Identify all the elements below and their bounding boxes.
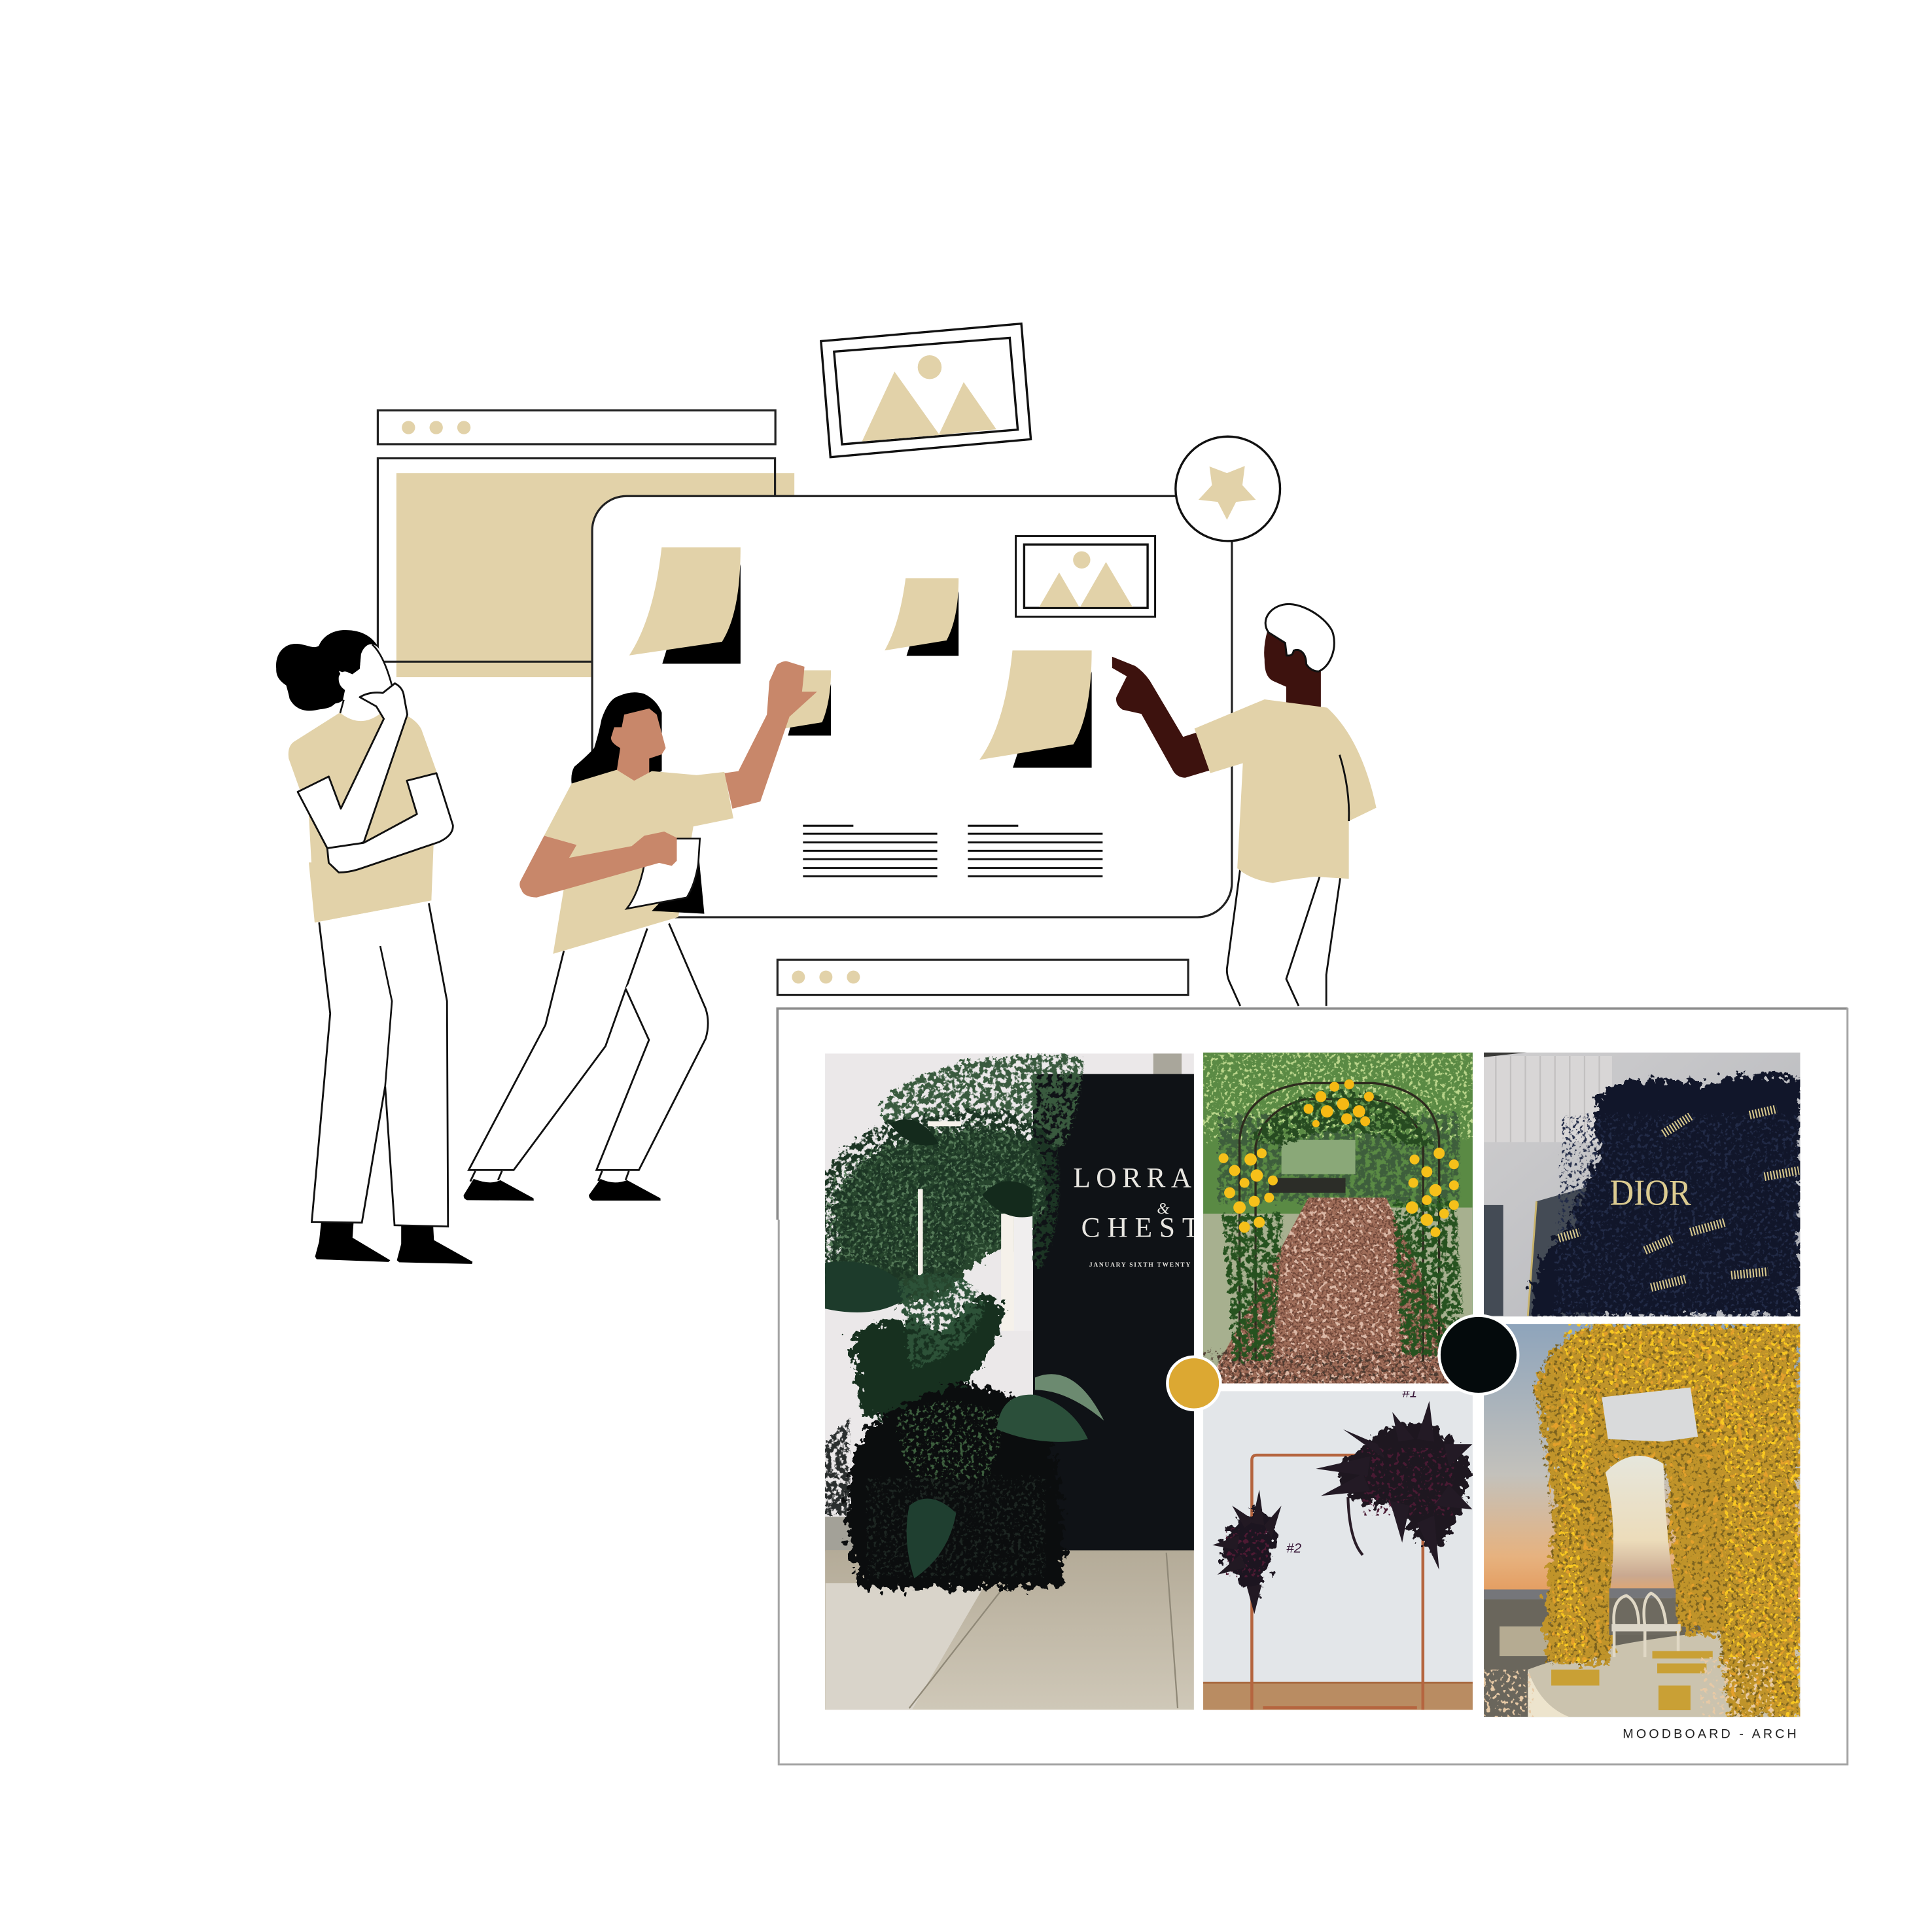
- wood floor: [1203, 1683, 1473, 1710]
- ground: [1484, 1600, 1800, 1717]
- sign text: &: [1157, 1200, 1169, 1218]
- photo: copper frame with dark flowers: [1203, 1386, 1473, 1710]
- hair: [276, 630, 380, 711]
- shirt: [544, 770, 733, 954]
- caption: MOODBOARD - ARCH: [1623, 1727, 1797, 1741]
- colour swatch: gold: [1167, 1357, 1220, 1410]
- foliage: dense green texture: [823, 1110, 1060, 1306]
- pointing arm: [1112, 657, 1210, 778]
- person: woman placing a note: [464, 661, 817, 1201]
- flower spray: large: [1337, 1422, 1469, 1555]
- head and neck: [1264, 631, 1321, 707]
- browser bar: bottom: [777, 960, 1188, 995]
- arch body: [1534, 1324, 1800, 1717]
- shirt arm line: [1340, 755, 1349, 821]
- sticky note: large top left: [629, 548, 741, 664]
- photo: dark foliage installation with logo: [1483, 1052, 1800, 1317]
- colour swatch: black: [1439, 1316, 1518, 1394]
- foot left: [464, 1179, 534, 1201]
- dark panels: [1483, 1183, 1602, 1316]
- label #2: #2: [1286, 1541, 1302, 1556]
- legs: [311, 903, 448, 1227]
- photo: garden arch with yellow flowers: [1195, 1047, 1479, 1384]
- arch flowers: orange: [1534, 1324, 1800, 1717]
- sign board: [1033, 1074, 1195, 1551]
- canopy: [1195, 1047, 1479, 1140]
- person: woman thinking: [276, 630, 472, 1264]
- platform floor: [1528, 1626, 1800, 1717]
- text lines: right column: [968, 826, 1102, 876]
- vines: [1222, 1201, 1466, 1361]
- canopy: [1602, 1388, 1698, 1441]
- distant tables: [1269, 1178, 1346, 1193]
- foliage: dark lower mass: [846, 1385, 1064, 1589]
- folded arm: [327, 773, 453, 873]
- flowers: right: [1406, 1148, 1459, 1237]
- hair: [571, 692, 662, 788]
- foliage: top dark leaves: [890, 1119, 1032, 1218]
- paper: [627, 839, 700, 909]
- main board: [592, 496, 1232, 917]
- sticky note: held by the woman: [779, 671, 831, 735]
- sign text: CHEST: [1081, 1212, 1199, 1243]
- chairs: [1614, 1593, 1678, 1657]
- foot left: [315, 1223, 390, 1262]
- fern: [1035, 1374, 1104, 1420]
- shirt: [1195, 699, 1377, 883]
- raised arm: [298, 683, 408, 850]
- beach: [1609, 1598, 1676, 1635]
- grass: [1203, 1208, 1473, 1384]
- bottom flowers: [1483, 1657, 1774, 1717]
- planter: [1500, 1626, 1551, 1656]
- shirt: [289, 712, 436, 922]
- illustration: team building a moodboard: [276, 324, 1377, 1264]
- legs: [468, 928, 647, 1170]
- browser bar: top left: [378, 410, 775, 444]
- photo: green and black floral backdrop with sign: [823, 1053, 1199, 1710]
- face: [339, 644, 395, 722]
- large leaf: [997, 1395, 1088, 1442]
- path: [1208, 1198, 1473, 1384]
- foliage: monstera: [824, 1261, 912, 1312]
- pleated wall: [1484, 1052, 1612, 1142]
- white posts: [918, 1121, 1014, 1331]
- shirt hem: [309, 862, 431, 922]
- sticky note: large right: [979, 650, 1092, 767]
- foliage: dense green base: [835, 1127, 1044, 1301]
- person: man pointing at the board: [1112, 604, 1377, 1006]
- star badge: [1176, 436, 1280, 541]
- wall gap right of posts: [1014, 1214, 1032, 1266]
- hair: [1265, 604, 1334, 671]
- foot right: [397, 1226, 472, 1264]
- arch opening sky: [1606, 1456, 1676, 1597]
- small picture frame: [1016, 536, 1155, 617]
- copper frame: [1252, 1455, 1423, 1710]
- leg inner line: [380, 946, 392, 1086]
- gold sprigs: feathers: [1558, 1109, 1799, 1288]
- browser window with beige block: [378, 459, 794, 677]
- flower spray: small: [1222, 1505, 1274, 1600]
- hanging stem: [1348, 1497, 1363, 1555]
- photo: golden floral arch at sunset: [1483, 1324, 1800, 1717]
- sticky note: small top: [885, 578, 958, 656]
- raised arm: [724, 661, 817, 809]
- foot right: [589, 1179, 661, 1201]
- forest: [1220, 1115, 1460, 1201]
- text lines: left column: [803, 826, 938, 876]
- face line: [340, 644, 392, 713]
- spray fronds: small: [1212, 1490, 1282, 1614]
- spray fronds: large: [1316, 1401, 1473, 1570]
- legs: [1227, 868, 1341, 1006]
- sea in opening: [1609, 1589, 1676, 1598]
- gold boxes: [1551, 1651, 1713, 1710]
- logo text: DIOR: [1610, 1172, 1691, 1213]
- panel: moodboard sheet: [777, 1008, 1848, 1765]
- lower arm: [519, 832, 676, 898]
- arch frame: [1240, 1083, 1439, 1361]
- tilted picture frame: [821, 324, 1031, 457]
- label #1: #1: [1402, 1386, 1417, 1401]
- arch flowers: yellow: [1555, 1324, 1800, 1717]
- sign text: JANUARY SIXTH TWENTY: [1089, 1262, 1190, 1269]
- heart leaf: [907, 1499, 956, 1578]
- foliage: airy top: [878, 1053, 1085, 1154]
- flowers: top: [1304, 1080, 1374, 1127]
- flowers: left: [1219, 1148, 1278, 1233]
- sign text: LORRA: [1073, 1163, 1191, 1194]
- dark foliage: [1533, 1076, 1800, 1316]
- sea: [1484, 1589, 1558, 1600]
- ankle lines: [470, 1171, 629, 1182]
- sign text: [1074, 1168, 1194, 1267]
- paper shadow: [652, 850, 704, 914]
- face and neck: [611, 709, 666, 784]
